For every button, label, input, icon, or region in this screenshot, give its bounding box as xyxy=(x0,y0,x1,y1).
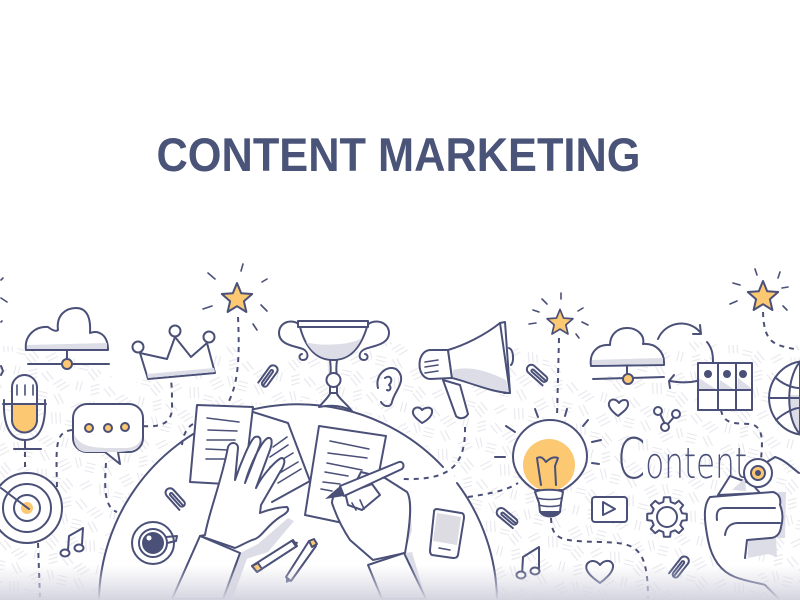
round table top xyxy=(99,401,497,600)
icon: light bulb xyxy=(495,409,601,516)
icon: lower paper clip by bulb xyxy=(495,506,519,528)
icon: paper clip top xyxy=(258,364,279,388)
icon: paper clip on table xyxy=(164,486,186,510)
smartphone xyxy=(430,509,464,558)
icon: star right xyxy=(730,269,788,310)
left hand on table xyxy=(172,437,294,600)
icon: cloud left xyxy=(26,308,109,369)
handwritten word Content: Content xyxy=(617,427,747,492)
icon: coffee cup xyxy=(132,522,177,564)
icon: music note right xyxy=(516,547,540,578)
icon: music note left xyxy=(60,528,84,556)
sync arrows xyxy=(658,324,713,388)
icon: share nodes xyxy=(654,407,680,431)
pencil right xyxy=(286,539,317,583)
panel: sheet of paper one xyxy=(190,405,253,485)
icon: star left xyxy=(203,264,267,330)
panel: sheet of paper three xyxy=(305,426,386,523)
icon: ear xyxy=(377,368,401,406)
icon: cloud right xyxy=(591,328,664,384)
icon: big heart xyxy=(586,561,613,583)
bottom fade xyxy=(0,565,800,600)
icon: play button xyxy=(592,497,627,522)
icon: upper paper clip right xyxy=(525,363,549,385)
icon: server grid xyxy=(698,363,752,410)
icon: gear xyxy=(647,497,687,537)
icon: target with arrow xyxy=(0,473,62,543)
icon: heart small right xyxy=(609,400,628,416)
pencil left xyxy=(252,540,298,572)
right hand writing with pen xyxy=(325,462,426,599)
icon: heart near ear xyxy=(413,407,432,423)
icon: globe xyxy=(769,362,800,434)
icon: star centre xyxy=(529,293,588,338)
icon: speech bubble xyxy=(73,404,143,464)
icon: microphone xyxy=(3,375,46,449)
panel: sheet of paper two xyxy=(253,412,310,502)
dashed connector lines xyxy=(25,312,799,599)
icon: trophy xyxy=(279,321,389,411)
doodle background texture xyxy=(0,340,800,600)
icon: megaphone xyxy=(420,322,513,418)
title: CONTENT MARKETING xyxy=(156,128,640,181)
icon: crown xyxy=(132,326,215,379)
icon: paper clip bottom right xyxy=(669,555,691,579)
left edge partial icons xyxy=(1,278,7,375)
right hand holding pen xyxy=(705,457,799,599)
